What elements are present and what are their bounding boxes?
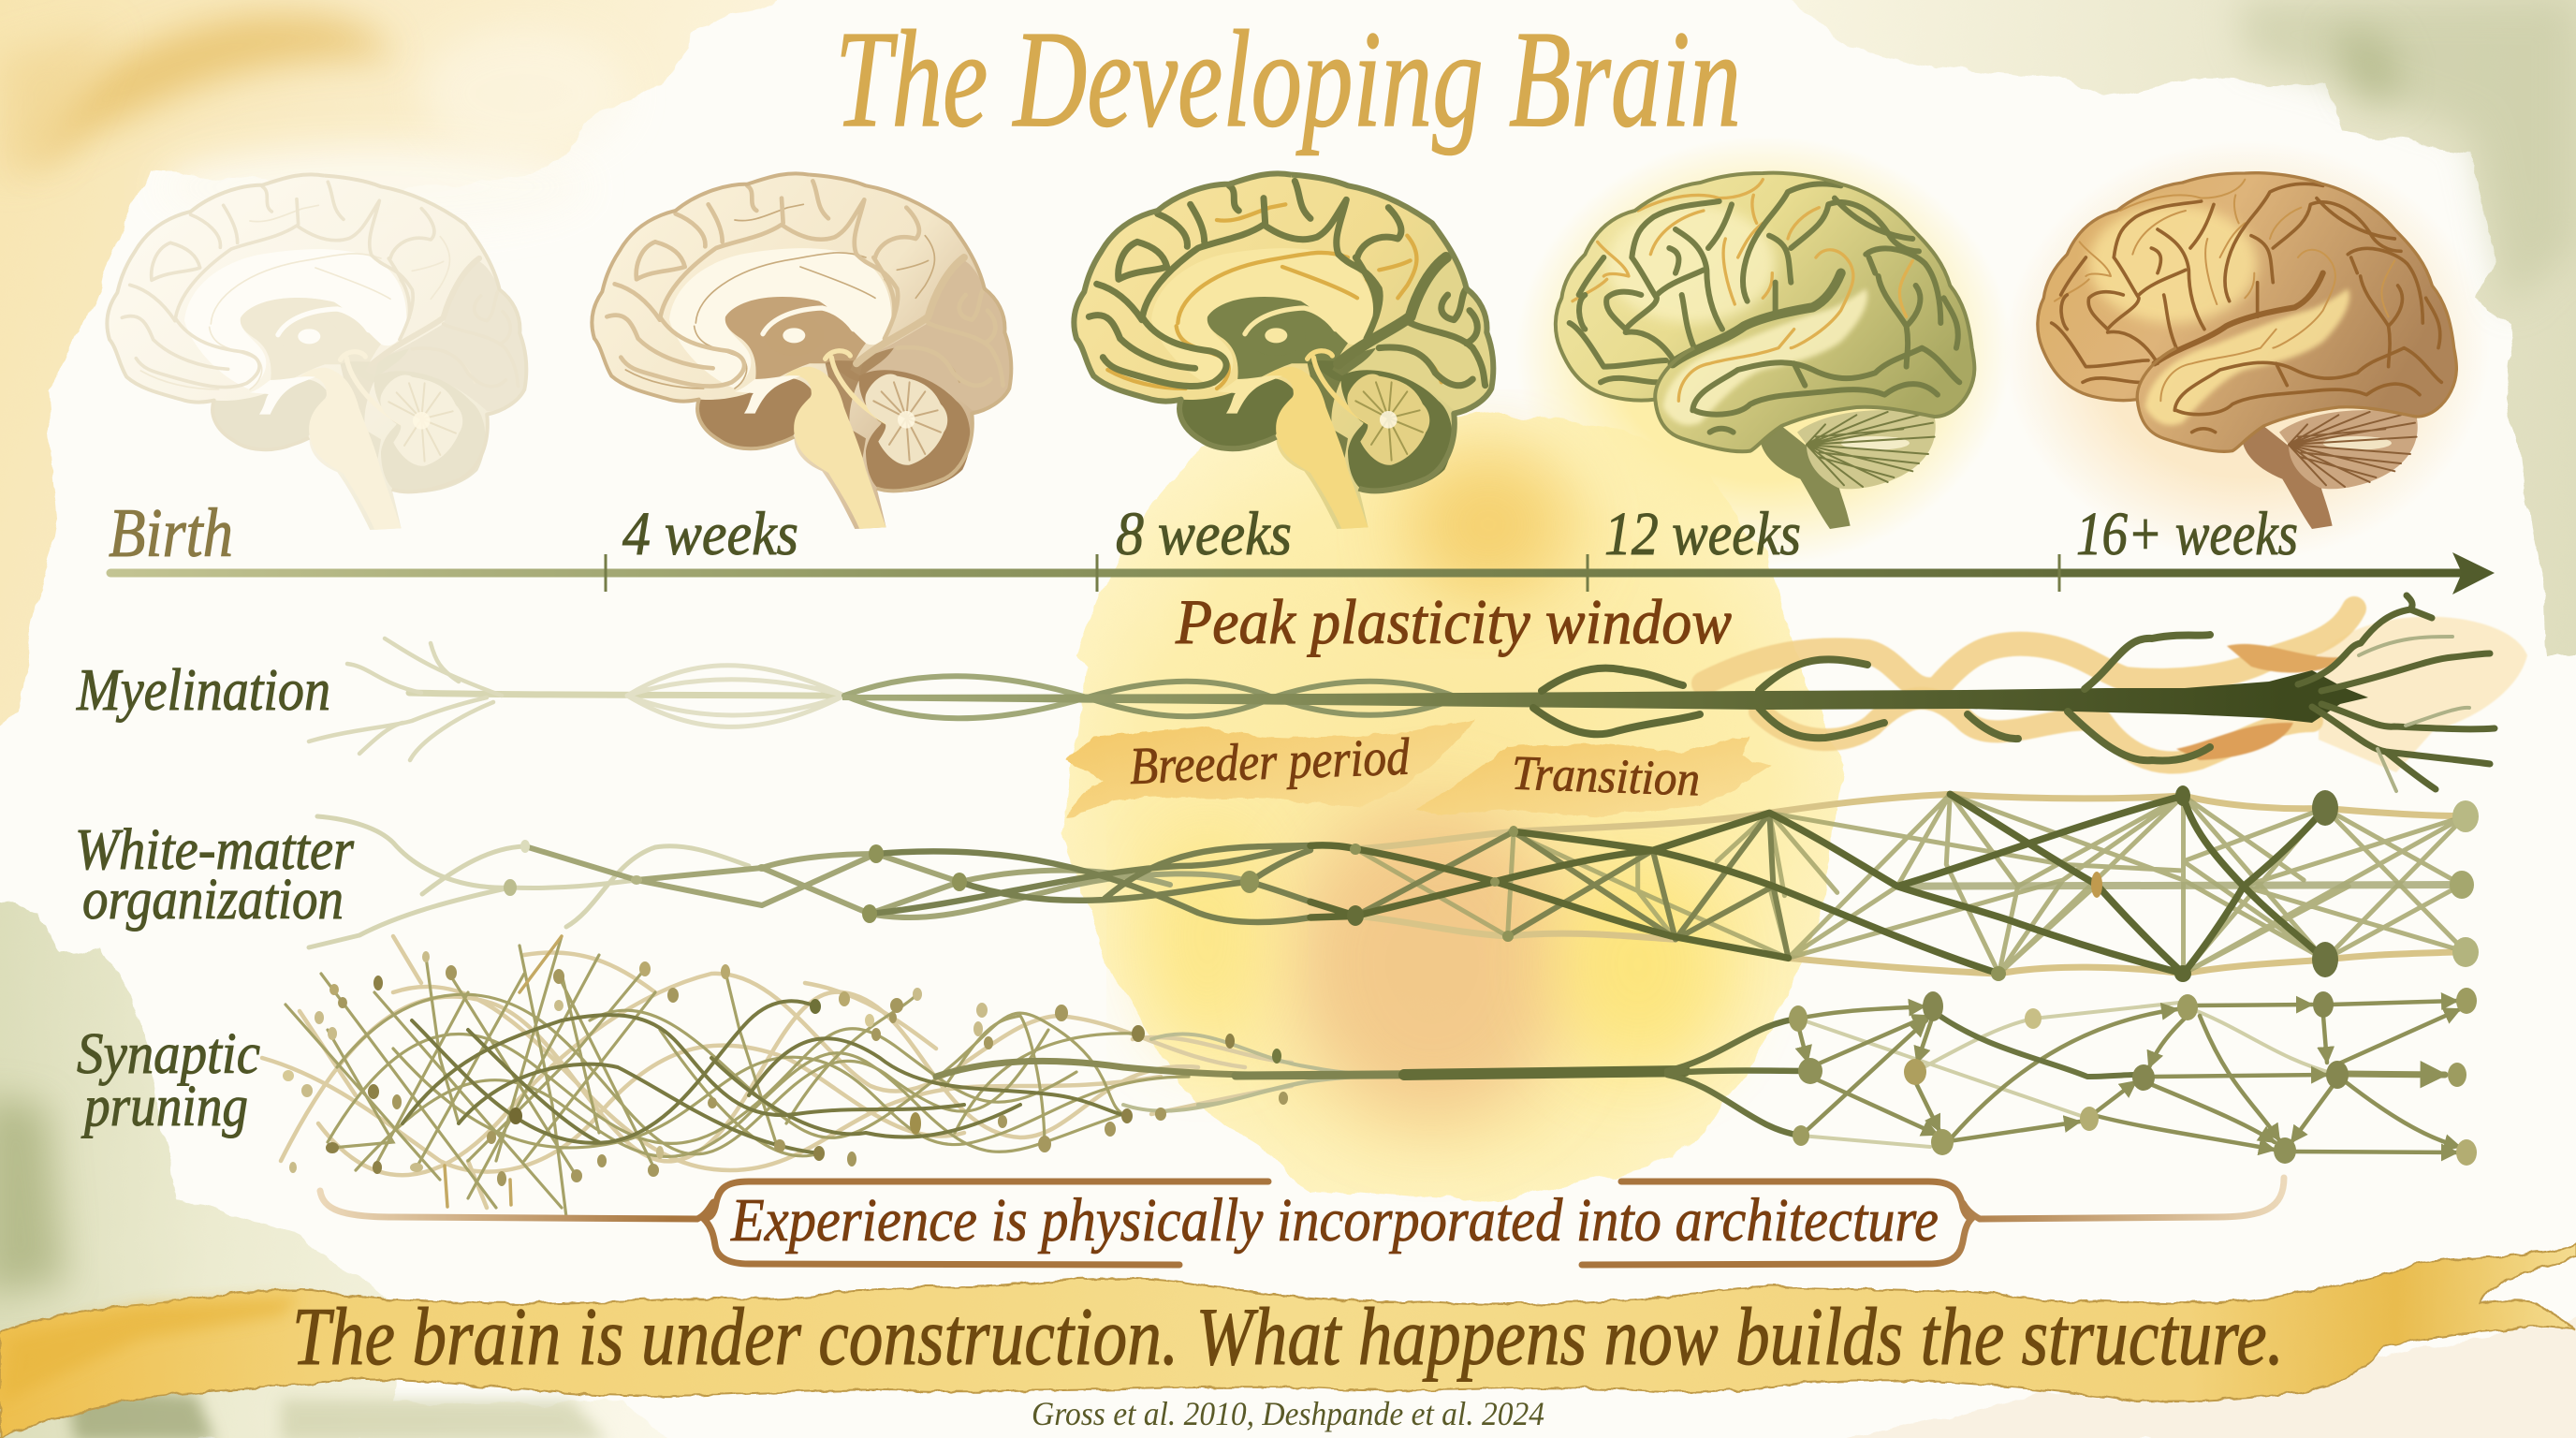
pale fibres [262, 936, 1292, 1208]
row label: Synaptic pruning: Synaptic [77, 1022, 260, 1086]
left pale axon [409, 693, 836, 696]
ribbon: breeder period [1066, 720, 1474, 818]
timeline arrow [110, 552, 2495, 594]
callout: experience brace [320, 1178, 2284, 1265]
main pruned trunk [1236, 1073, 1667, 1076]
ribbon: transition [1416, 735, 1771, 816]
title: The Developing Brain [835, 3, 1741, 156]
row label: Synaptic pruning [77, 1022, 260, 1138]
row: myelination [309, 595, 2527, 791]
row label: White-matter organization [75, 818, 355, 932]
mature network traced in crop coordinates [1310, 794, 2466, 974]
label: 12 weeks: 12 weeks [1604, 500, 1801, 568]
label: Birth: Birth [109, 495, 233, 572]
brain: 12 weeks [1556, 173, 1974, 529]
label: 16+ weeks: 16+ weeks [2076, 500, 2298, 568]
row label: Myelination: Myelination [76, 656, 330, 723]
row label: White-matter organization: White-matter [75, 818, 355, 882]
citation: Gross et al. 2010, Deshpande et al. 2024 [1032, 1395, 1544, 1432]
pale connections [1798, 1002, 2337, 1147]
glow: brain 12 weeks [1515, 136, 2012, 566]
synapse dots [283, 951, 1288, 1186]
white-matter nodes [504, 785, 2479, 982]
row label: Synaptic pruning: pruning [80, 1075, 248, 1138]
watercolor wash: lower left [0, 899, 674, 1438]
pale left fibres [309, 816, 749, 947]
converging trunk strands [936, 1061, 1367, 1077]
peak plasticity glow [1061, 413, 1842, 1203]
row: synaptic pruning refined network [1236, 988, 2477, 1166]
brain: 8 weeks [1074, 173, 1493, 529]
watercolor wash: lower right [1840, 1311, 2576, 1438]
watercolor wash: top left [0, 0, 786, 749]
bottom banner [0, 1245, 2576, 1438]
mid fibres [285, 936, 1189, 1217]
label: 4 weeks: 4 weeks [622, 500, 798, 568]
brain: 16+ weeks [2038, 173, 2456, 529]
timeline labels [109, 495, 2298, 572]
label: Breeder period: Breeder period [1129, 728, 1412, 796]
branch collaterals [1533, 635, 2210, 761]
brain: 4 weeks [592, 173, 1011, 529]
main axon [842, 670, 2368, 723]
row: synaptic pruning tangle [262, 936, 1404, 1217]
row: white-matter organization [309, 785, 2479, 982]
network nodes [1789, 988, 2477, 1166]
callout text: Experience is physically incorporated into architecture [730, 1186, 1939, 1255]
right dendrites [2298, 595, 2495, 789]
row label: White-matter organization: organization [82, 868, 344, 932]
brain: birth [107, 174, 526, 530]
label: Transition: Transition [1511, 747, 1701, 807]
glow: brain 16+ weeks [2003, 140, 2490, 562]
early olive fibres [525, 846, 1250, 917]
label: 8 weeks: 8 weeks [1116, 500, 1292, 568]
watercolor wash: top right [1793, 0, 2576, 655]
myelin sheaths [1704, 609, 2527, 772]
peak plasticity label: Peak plasticity window [1175, 586, 1732, 657]
dark fibres [402, 1001, 1127, 1153]
arrow connections [1798, 1001, 2460, 1152]
